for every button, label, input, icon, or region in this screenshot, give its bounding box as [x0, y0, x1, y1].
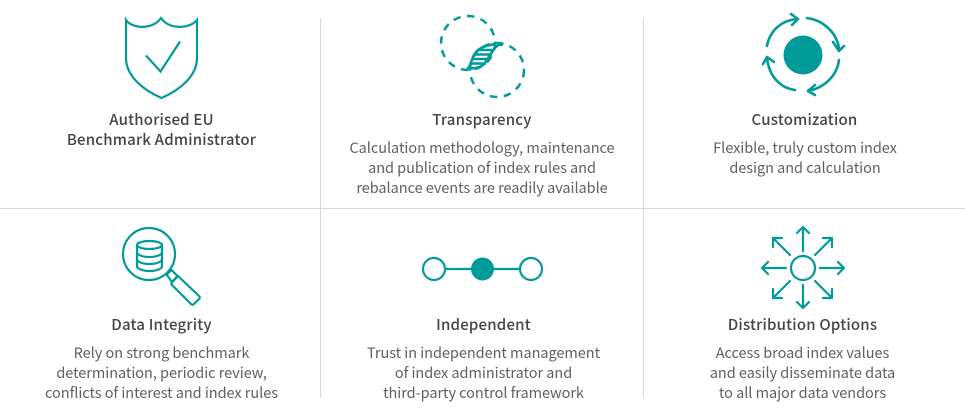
panel: Data Integrity: determination, periodic review,	[56, 362, 267, 383]
icon: overlapping dashed circles with DNA helix	[441, 16, 524, 97]
panel: Independent: Trust in independent management	[367, 342, 600, 363]
icon: magnifier over database	[123, 228, 200, 305]
panel: Customization: design and calculation	[729, 157, 881, 178]
panel: Authorised EU Benchmark Administrator	[67, 109, 256, 150]
panel: Independent: third-party control framework	[383, 382, 584, 403]
panel: Distribution Options: to all major data vendors	[719, 382, 886, 403]
panel: Transparency: Transparency	[432, 109, 532, 130]
panel: Distribution Options	[710, 314, 895, 403]
panel: Customization	[713, 109, 897, 178]
panel: Customization: Customization	[752, 109, 857, 130]
icon: circular arrows around a solid dot	[763, 14, 844, 95]
panel: Transparency: rebalance events are readily available	[356, 177, 608, 198]
panel: Independent: Independent	[436, 314, 531, 335]
panel: Distribution Options: and easily disseminate data	[710, 362, 895, 383]
panel: Distribution Options: Distribution Options	[728, 314, 877, 335]
icon: three connected nodes	[423, 258, 542, 280]
panel: Data Integrity: Data Integrity	[111, 314, 212, 335]
panel: Transparency: Calculation methodology, maintenance	[349, 137, 615, 158]
panel: Data Integrity: Rely on strong benchmark	[74, 342, 249, 363]
panel: Independent	[367, 314, 600, 403]
panel: Transparency: and publication of index rules and	[368, 157, 596, 178]
panel: Authorised EU Benchmark Administrator: Authorised EU	[109, 109, 214, 130]
panel: Independent: of index administrator and	[395, 362, 572, 383]
panel: Authorised EU Benchmark Administrator: Benchmark Administrator	[67, 129, 256, 150]
panel: Data Integrity: conflicts of interest and index rules	[45, 382, 278, 403]
panel: Data Integrity	[45, 314, 278, 403]
icon: hub with eight outward arrows	[762, 227, 844, 308]
icon: shield with check	[126, 18, 197, 98]
panel: Transparency	[349, 109, 615, 198]
panel: Customization: Flexible, truly custom index	[713, 137, 897, 158]
panel: Distribution Options: Access broad index values	[716, 342, 889, 363]
